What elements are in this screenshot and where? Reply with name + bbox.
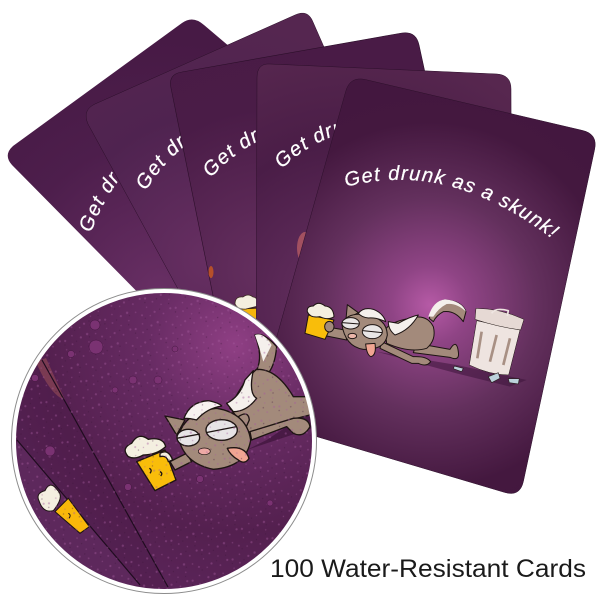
head	[178, 408, 251, 469]
tail	[255, 334, 277, 375]
tongue	[227, 448, 249, 462]
skunk nose	[348, 333, 357, 339]
skunk arm	[325, 327, 347, 340]
card 3 beer mug	[235, 295, 258, 322]
large droplets	[32, 320, 273, 506]
skunk ear	[346, 305, 358, 319]
skunk head	[342, 314, 387, 349]
card 2	[86, 12, 324, 296]
mug foam	[307, 303, 334, 319]
skunk hand	[325, 321, 334, 332]
mug	[137, 450, 176, 491]
skunk tail	[429, 300, 466, 322]
skunk back stripe	[388, 315, 418, 335]
lower left card area	[16, 442, 139, 586]
eyes	[177, 429, 200, 446]
card 3 partial artwork	[208, 266, 215, 320]
arm and hand	[250, 418, 310, 440]
back stripe	[227, 371, 257, 412]
trash can handle	[492, 309, 508, 316]
skunk hair	[358, 309, 386, 322]
label: 100 Water-Resistant Cards: 100 Water-Resistant Cards	[270, 555, 586, 583]
illustration: drunk skunk with mug and trash can	[305, 299, 527, 387]
body	[230, 369, 317, 433]
skunk tongue	[366, 343, 375, 357]
skunk legs	[413, 343, 459, 359]
shadow	[377, 352, 527, 387]
skin fragment	[36, 358, 65, 400]
card 1 (back)	[8, 20, 228, 290]
ears	[165, 416, 185, 435]
zoomed mug on lower card	[38, 485, 89, 533]
zoomed skunk	[125, 334, 317, 491]
water droplets	[10, 285, 320, 595]
mug	[305, 315, 334, 339]
card 4	[256, 64, 512, 338]
left card area	[0, 330, 168, 600]
card 3	[170, 32, 425, 319]
cans on the floor	[453, 366, 519, 384]
card edges	[17, 360, 168, 587]
card 4 partial artwork	[297, 232, 313, 264]
trash can stripes	[477, 332, 510, 365]
front card caption: Get drunk as a skunk!	[345, 165, 560, 238]
shadow	[249, 416, 312, 449]
magnified circle	[0, 285, 320, 600]
skunk eyes	[342, 318, 359, 329]
skunk body	[385, 317, 434, 350]
front card	[276, 78, 596, 494]
trash can lid	[475, 308, 524, 330]
nose	[198, 448, 210, 455]
trash can body	[469, 321, 520, 375]
wet card surface	[10, 285, 320, 595]
hair	[184, 401, 222, 420]
